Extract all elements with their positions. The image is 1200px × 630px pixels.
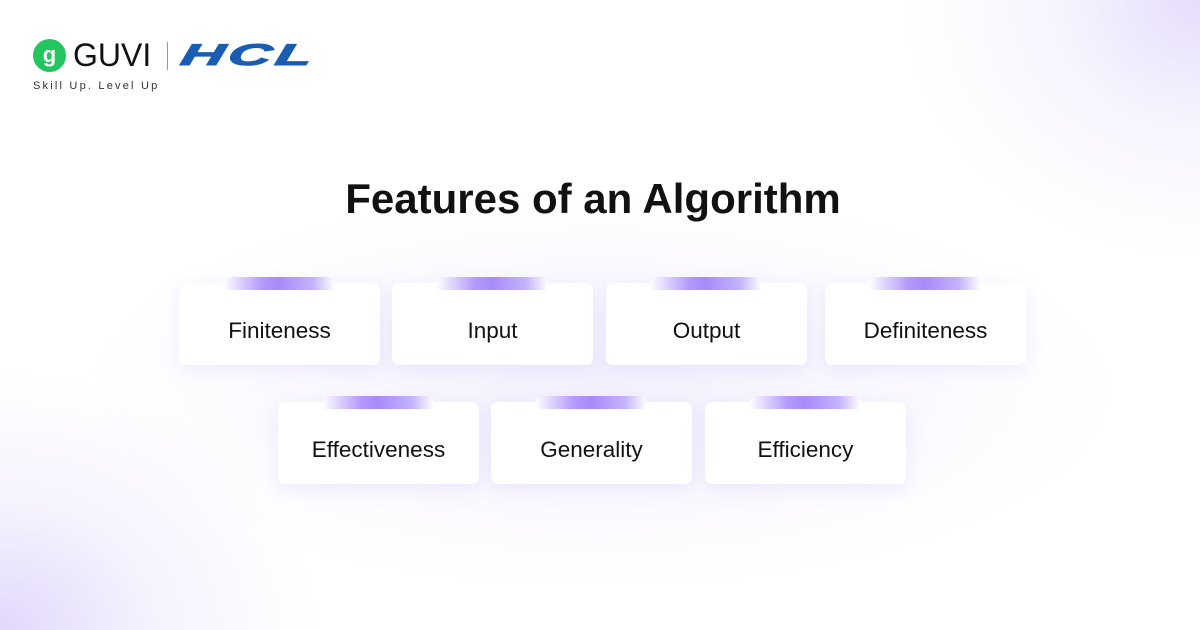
- card: Effectiveness: Effectiveness: [312, 437, 445, 462]
- logo: HCL: [178, 39, 320, 72]
- card: Effectiveness: [278, 402, 479, 484]
- text: GUVI: GUVI: [73, 37, 151, 73]
- text: HCL: [167, 42, 168, 70]
- card: Generality: Generality: [540, 437, 643, 462]
- logo: [33, 37, 320, 92]
- card: Output: [606, 283, 807, 365]
- card: Efficiency: Efficiency: [758, 437, 853, 462]
- title: Features of an Algorithm: [345, 175, 841, 222]
- icon: guvi green circle: g: [43, 42, 56, 67]
- card: Definiteness: Definiteness: [864, 318, 987, 343]
- card: Finiteness: Finiteness: [228, 318, 331, 343]
- card: Efficiency: [705, 402, 906, 484]
- card: Input: Input: [467, 318, 518, 343]
- icon: guvi green circle: [33, 39, 66, 72]
- card: Output: Output: [673, 318, 740, 343]
- card: Input: [392, 283, 593, 365]
- card: Finiteness: [179, 283, 380, 365]
- card: Definiteness: [825, 283, 1026, 365]
- card: Generality: [491, 402, 692, 484]
- tagline: Skill Up. Level Up: [33, 80, 159, 92]
